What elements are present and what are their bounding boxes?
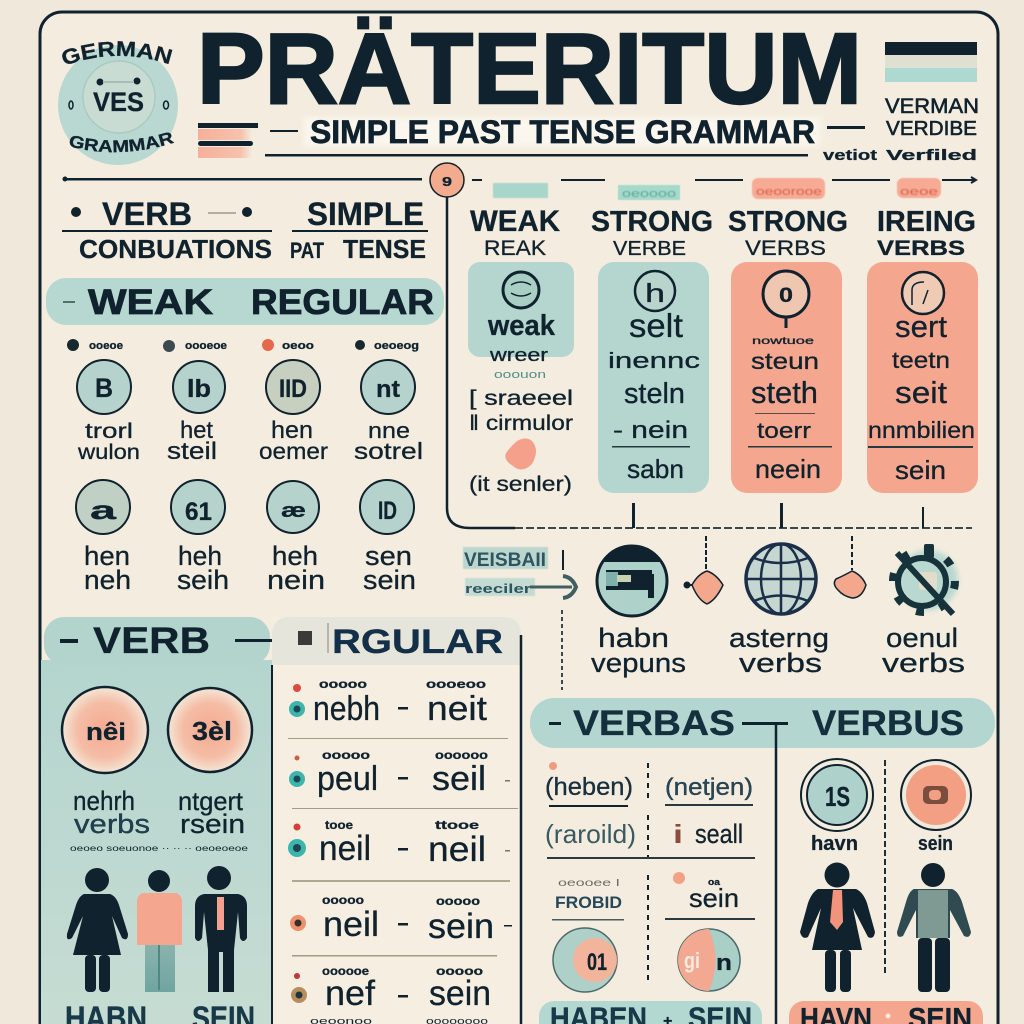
row 3: tooe bbox=[325, 818, 353, 832]
left comparison list: (netjen) bbox=[665, 774, 753, 801]
connector from timeline around columns bbox=[447, 197, 972, 528]
column: irregular verbs: nnmbilien bbox=[868, 417, 975, 443]
row 5 bbox=[291, 964, 491, 1024]
heading: verb conjugations: CONBUATIONS bbox=[79, 234, 272, 264]
panel: verbas and verbus: VERBAS bbox=[573, 704, 735, 743]
row 2 bbox=[289, 748, 518, 809]
panel: weak verb icon grid: hen bbox=[271, 417, 313, 444]
badge: German grammar: GRAMMAR bbox=[70, 132, 174, 152]
column: weak: WEAK bbox=[470, 205, 560, 238]
badge: German grammar bbox=[58, 41, 178, 165]
column: strong verbs teal: sabn bbox=[627, 454, 684, 484]
heading: verb conjugations: TENSE bbox=[343, 234, 426, 264]
label: habn verbs: habn bbox=[598, 623, 669, 653]
person: man with tie bbox=[195, 866, 247, 992]
pill: havn sein bbox=[789, 1001, 983, 1024]
panel: weak verb icon grid: nne bbox=[368, 418, 410, 443]
timeline divider bbox=[62, 163, 976, 197]
column: strong verbs coral: nowtuoe bbox=[752, 336, 815, 347]
row 5: oooooe bbox=[322, 964, 369, 978]
heading: verb conjugations: SIMPLE bbox=[307, 196, 424, 232]
panel: weak verb icon grid: lb bbox=[187, 375, 211, 403]
flag and side note: vetiot bbox=[823, 147, 877, 164]
panel: weak verb icon grid: sein bbox=[363, 565, 416, 595]
panel: weak verb icon grid: oeoo bbox=[282, 340, 314, 352]
column: weak: REAK bbox=[484, 237, 546, 260]
badge: German grammar: VES bbox=[93, 87, 144, 117]
panel: weak verb icon grid: sotrel bbox=[354, 438, 423, 464]
column: strong verbs teal: STRONG bbox=[591, 206, 713, 238]
panel: weak verb icon grid: nt bbox=[376, 376, 400, 403]
arrow label: verbs bbox=[463, 547, 576, 690]
arrow label: verbs: VEISBAII bbox=[464, 550, 546, 571]
label: habn verbs bbox=[591, 623, 686, 678]
column: strong verbs coral: STRONG bbox=[728, 206, 848, 238]
panel: weak verb icon grid: oemer bbox=[259, 438, 328, 464]
row 1 bbox=[288, 677, 508, 739]
circle: sein: sein bbox=[918, 833, 953, 855]
label: haben sein bbox=[65, 1000, 255, 1024]
column: weak: ‖ cirmulor bbox=[469, 412, 573, 435]
badge: German grammar: GERMAN bbox=[62, 41, 172, 64]
pill: haben sein bbox=[539, 1001, 762, 1024]
heading: verb conjugations: PAT bbox=[290, 238, 324, 263]
column: strong verbs teal: - nein bbox=[613, 417, 688, 444]
left comparison list: oa bbox=[708, 877, 721, 887]
row 4: neil bbox=[323, 905, 379, 944]
person: woman with tie bbox=[800, 862, 875, 992]
column: irregular verbs: teetn bbox=[892, 347, 950, 373]
label: oenul verbs: verbs bbox=[882, 648, 965, 678]
column: strong verbs teal: VERBE bbox=[613, 238, 686, 260]
pill: weak regular bbox=[46, 278, 444, 325]
flag and side note bbox=[823, 42, 979, 164]
row 4: ooooo bbox=[436, 894, 480, 908]
label: oenul verbs: oenul bbox=[886, 623, 958, 653]
column: strong verbs coral: 0 bbox=[779, 284, 793, 307]
subtitle with rules bbox=[198, 114, 865, 158]
row 1: ooooo bbox=[319, 677, 367, 691]
row 3: neil bbox=[428, 830, 486, 869]
pill: weak regular: WEAK bbox=[88, 283, 213, 322]
circle: haven: 1S bbox=[825, 781, 850, 812]
row 1: neit bbox=[427, 690, 488, 728]
flag and side note: VERMAN bbox=[885, 95, 979, 118]
panel: weak verb icon grid: sen bbox=[365, 541, 412, 571]
column: strong verbs teal: steln bbox=[624, 378, 685, 410]
blurred column tags: oeoooo bbox=[622, 188, 676, 200]
row 5: nef bbox=[325, 974, 375, 1013]
column: weak: [ sraeeel bbox=[469, 387, 573, 410]
heading: verb conjugations bbox=[62, 196, 428, 264]
label: astering verbs bbox=[729, 623, 829, 678]
column: strong verbs coral bbox=[728, 206, 848, 493]
left comparison list: n bbox=[716, 950, 732, 975]
circle: haven: havn bbox=[811, 833, 858, 855]
row 4 bbox=[290, 893, 512, 956]
blurred column tags: oeoorooe bbox=[756, 186, 822, 198]
row 2: peul bbox=[317, 760, 378, 798]
panel: weak verb icon grid: wulon bbox=[77, 441, 140, 464]
panel: verb teal: nehrh bbox=[73, 786, 135, 816]
left comparison list: (heben) bbox=[545, 773, 633, 801]
icon: haben verbs card bbox=[597, 546, 667, 616]
row 2: oooooo bbox=[435, 748, 488, 762]
subtitle with rules: SIMPLE PAST TENSE GRAMMAR bbox=[310, 114, 815, 150]
panel: weak verb icon grid: neh bbox=[84, 565, 131, 595]
panel: weak verb icon grid: 61 bbox=[185, 498, 212, 526]
column: weak: ooouon bbox=[494, 369, 546, 381]
panel: weak verb icon grid: hen bbox=[84, 541, 130, 571]
panel: verb teal: VERB bbox=[93, 620, 210, 661]
panel: verb teal: verbs bbox=[74, 809, 150, 839]
circle: haven bbox=[801, 759, 873, 855]
panel: verb teal: rsein bbox=[180, 809, 245, 839]
left comparison list: seall bbox=[695, 819, 743, 849]
pill: weak regular: REGULAR bbox=[251, 283, 434, 322]
panel: irregular list: RGULAR bbox=[332, 623, 503, 661]
left comparison list: oeooee I bbox=[558, 878, 620, 889]
row 3: neil bbox=[319, 829, 371, 868]
panel: weak verb icon grid: IID bbox=[279, 375, 307, 403]
blurred column tags bbox=[493, 178, 941, 200]
arrow label: verbs: reeciler bbox=[465, 581, 531, 596]
column: strong verbs teal: h bbox=[645, 278, 665, 308]
row 3: ttooe bbox=[435, 818, 479, 832]
panel: verbas and verbus bbox=[530, 698, 995, 1024]
panel: verb teal: 3èl bbox=[192, 716, 232, 746]
person: man bbox=[897, 863, 971, 992]
panel: weak verb icon grid: ID bbox=[378, 497, 397, 525]
column: strong verbs coral: neein bbox=[755, 454, 821, 484]
column: strong verbs coral: steun bbox=[751, 348, 819, 374]
panel: weak verb icon grid: oeoeog bbox=[374, 340, 419, 352]
row 5: ooooo bbox=[436, 964, 483, 978]
row 1: nebh bbox=[313, 690, 380, 728]
connector node 1 bbox=[684, 536, 723, 604]
column: strong verbs coral: VERBS bbox=[745, 237, 826, 260]
column: weak bbox=[468, 205, 574, 496]
label: habn verbs: vepuns bbox=[591, 648, 686, 678]
column: irregular verbs bbox=[867, 206, 978, 493]
left comparison list: sein bbox=[689, 883, 739, 913]
column: strong verbs teal: inennc bbox=[608, 348, 700, 373]
panel: verb teal: nêi bbox=[86, 719, 126, 746]
column: weak: (it senler) bbox=[469, 473, 572, 496]
panel: weak verb icon grid: B bbox=[95, 373, 113, 403]
row 5: sein bbox=[429, 974, 491, 1013]
panel: verb teal: oeoeo soeuonoe ·· ·· ·· oeoeoeoe bbox=[70, 844, 249, 853]
column: strong verbs teal: selt bbox=[629, 307, 683, 344]
column: strong verbs coral: toerr bbox=[757, 418, 811, 443]
icon: globe bbox=[746, 544, 816, 614]
column: irregular verbs: seit bbox=[895, 375, 947, 410]
circle: sein bbox=[901, 760, 971, 855]
person: casual bbox=[137, 870, 182, 992]
panel: weak verb icon grid: seih bbox=[177, 565, 229, 595]
column: irregular verbs: IREING bbox=[877, 206, 976, 238]
icon: gear bbox=[893, 544, 958, 614]
panel: verb teal: ntgert bbox=[178, 786, 244, 816]
left comparison list bbox=[545, 762, 755, 992]
panel: weak verb icon grid: trorl bbox=[85, 420, 133, 443]
column: irregular verbs: sert bbox=[895, 309, 947, 344]
title: PRÄTERITUM bbox=[197, 13, 862, 125]
row 4: sein bbox=[428, 907, 494, 946]
panel: weak verb icon grid: oooeoe bbox=[185, 340, 227, 352]
label: oenul verbs bbox=[882, 623, 965, 678]
left comparison list: (raroild) bbox=[545, 819, 636, 849]
panel: weak verb icon grid: a bbox=[90, 495, 117, 525]
panel: irregular list bbox=[272, 617, 521, 1024]
heading: verb conjugations: VERB bbox=[102, 196, 192, 232]
row 2: ooooo bbox=[322, 748, 370, 762]
column: irregular verbs: sein bbox=[895, 455, 946, 485]
left comparison list: FROBID bbox=[555, 893, 622, 912]
panel: weak verb icon grid: heh bbox=[272, 541, 318, 571]
left comparison list: i bbox=[673, 819, 683, 849]
label: astering verbs: verbs bbox=[739, 648, 822, 678]
left comparison list: gi bbox=[684, 948, 700, 973]
panel: weak verb icon grid: ooeoe bbox=[89, 340, 123, 352]
column: weak: wreer bbox=[489, 345, 548, 365]
flag and side note: Verfiled bbox=[886, 147, 977, 164]
person: woman bbox=[67, 868, 128, 992]
column: strong verbs coral: steth bbox=[751, 375, 818, 410]
panel: weak verb icon grid: het bbox=[180, 417, 213, 444]
panel: weak verb icon grid: steil bbox=[167, 438, 217, 465]
panel: verbas and verbus: VERBUS bbox=[812, 704, 964, 743]
timeline divider: 9 bbox=[442, 174, 452, 189]
panel: weak verb icon grid: nein bbox=[267, 565, 325, 595]
column: strong verbs teal bbox=[591, 206, 713, 493]
flag and side note: VERDIBE bbox=[886, 118, 977, 140]
panel: verb teal bbox=[41, 617, 287, 1024]
blurred column tags: oeoe bbox=[900, 186, 938, 198]
left comparison list: 01 bbox=[587, 949, 607, 976]
row 2: seil bbox=[432, 760, 486, 798]
column: irregular verbs: VERBS bbox=[877, 237, 965, 260]
panel: weak verb icon grid bbox=[67, 339, 423, 595]
panel: weak verb icon grid: heh bbox=[178, 541, 222, 571]
column: weak: weak bbox=[487, 310, 556, 342]
label: astering verbs: asterng bbox=[729, 623, 829, 653]
panel: weak verb icon grid: æ bbox=[281, 500, 306, 522]
connector node 2 bbox=[834, 536, 866, 598]
row 4: ooooo bbox=[322, 893, 364, 907]
row 3 bbox=[288, 818, 510, 882]
row 1: oooeoo bbox=[426, 677, 486, 691]
